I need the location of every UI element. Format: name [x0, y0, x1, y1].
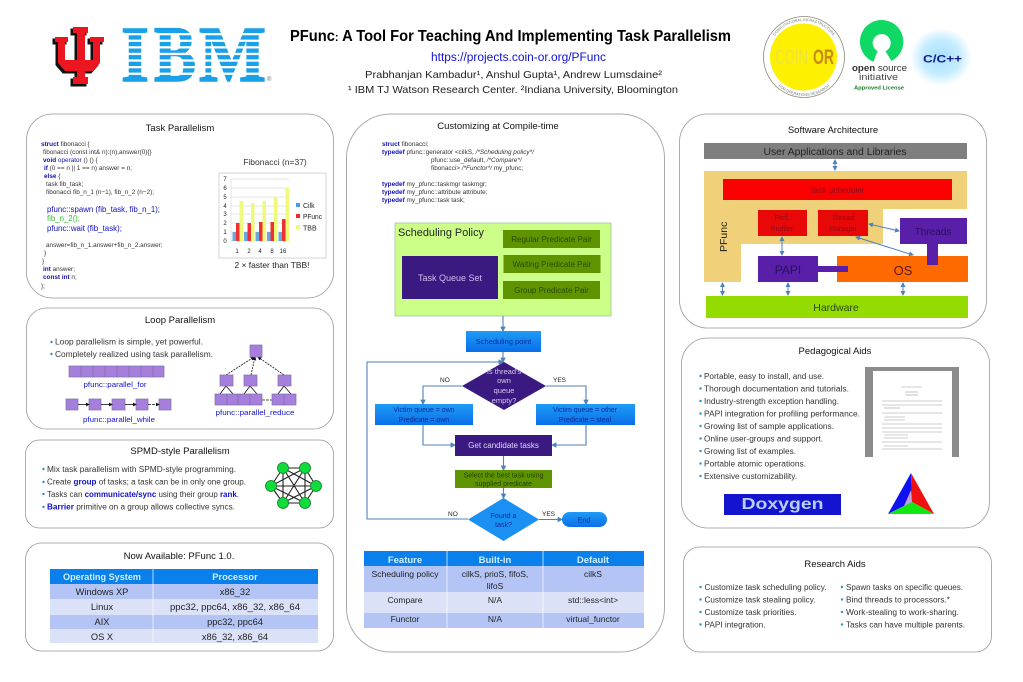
- flow: end: [562, 512, 607, 527]
- flow: select best task: [455, 470, 552, 488]
- flow: decision own queue empty: empty?: [492, 396, 516, 405]
- logo: C/C++: C/C++: [923, 54, 962, 66]
- bullets: Extensive customizability.: [704, 472, 797, 481]
- code listing: void operator () () {: [43, 157, 99, 164]
- code listing: fib_n_2();: [47, 214, 80, 223]
- bar chart: Fibonacci speedups: 4: [223, 204, 227, 210]
- flow: scheduling point: [466, 331, 541, 352]
- box: perf profiler: Profiler: [771, 226, 794, 233]
- logo: COIN-OR: OR: [813, 46, 834, 69]
- heading: Research Aids: [804, 559, 866, 570]
- code listing: typedef my_pfunc::attribute attribute;: [382, 189, 488, 196]
- box: threads: Threads: [915, 227, 951, 238]
- bullets: right column: Tasks can have multiple parents.: [846, 620, 965, 630]
- authors: Prabhanjan Kambadur¹, Anshul Gupta¹, Andrew Lumsdaine²: [365, 69, 663, 81]
- box: PFunc: PFunc: [718, 222, 730, 252]
- bullets: right column: Bind threads to processors.*: [846, 596, 950, 604]
- table: features: Scheduling policy: [372, 569, 439, 579]
- box: OS: [837, 256, 968, 282]
- code listing: struct fibonacci {: [41, 141, 91, 148]
- code listing: }: [44, 250, 47, 257]
- bar chart: Fibonacci speedups: TBB: [303, 226, 317, 232]
- code listing: typedef my_pfunc::taskmgr taskmgr;: [382, 181, 487, 188]
- box: thread manager: Manager: [829, 226, 857, 233]
- flow labels: [440, 377, 567, 518]
- table: operating systems and processors: ppc32, ppc64: [207, 617, 263, 627]
- bar chart: Fibonacci speedups: 6: [223, 186, 227, 192]
- table: features: Built-in: [479, 555, 512, 566]
- table: features: virtual_functor: [566, 614, 620, 624]
- box: thread manager: Thread: [832, 215, 854, 222]
- panel: Task Parallelism: [26, 114, 334, 298]
- flow: decision found a task: Found a: [491, 513, 516, 520]
- diagram: parallel_while: pfunc::parallel_while: [83, 415, 155, 424]
- logo: C/C++: [910, 28, 972, 86]
- bar chart: Fibonacci speedups: 2: [247, 249, 251, 255]
- bar chart: Fibonacci speedups: 0: [223, 239, 227, 245]
- bullets: Completely realized using task parallelism.: [55, 350, 213, 359]
- flow: select best task: Select the best task using: [464, 472, 543, 480]
- code listing: [382, 141, 535, 204]
- diagram: scheduling policy: [395, 223, 611, 316]
- logo: Doxygen: Doxygen: [742, 496, 824, 513]
- bullets: Growing list of sample applications.: [704, 422, 834, 431]
- flow: decision found a task: [468, 498, 539, 541]
- table: operating systems and processors: Linux: [91, 602, 113, 612]
- code listing: if (0 == n || 1 == n) answer = n;: [44, 165, 132, 172]
- code listing: answer=fib_n_1.answer+fib_n_2.answer;: [46, 242, 163, 249]
- bullets: Create group of tasks; a task can be in only one group.: [47, 478, 246, 486]
- bullets: Online user-groups and support.: [704, 434, 823, 444]
- panel: Software Architecture: [680, 114, 986, 328]
- flow: victim own: [375, 404, 473, 425]
- flow: select best task: supplied predicate: [475, 481, 532, 488]
- logo: Indiana University trident: [53, 27, 104, 86]
- code listing: pfunc::use_default, /*Compare*/: [431, 157, 523, 164]
- table: operating systems and processors: AIX: [94, 617, 110, 627]
- diagram: parallel_reduce: [215, 345, 296, 417]
- heading: SPMD-style Parallelism: [130, 446, 230, 457]
- table: features: Default: [577, 555, 610, 566]
- bullets: right column: [841, 583, 965, 630]
- table: features: cilkS, prioS, fifoS,: [462, 569, 528, 579]
- flow: victim other: [536, 404, 635, 425]
- table: operating systems and processors: Windows XP: [76, 587, 128, 597]
- bar chart: Fibonacci speedups: 3: [223, 212, 227, 218]
- bullets: Tasks can communicate/sync using their group rank.: [47, 490, 239, 499]
- logo: open source initiative: Approved License: [854, 86, 904, 92]
- code listing: else {: [44, 173, 61, 180]
- affiliations: ¹ IBM TJ Watson Research Center. ²Indiana University, Bloomington: [348, 84, 678, 96]
- bullets: Portable, easy to install, and use.: [704, 372, 824, 381]
- flow: victim own: Victim queue = own: [393, 407, 455, 414]
- table: features: Functor: [391, 614, 420, 624]
- bullets: right column: Spawn tasks on specific queues.: [846, 583, 963, 592]
- box: task scheduler: Task Scheduler: [810, 186, 865, 195]
- bullets: right column: Work-stealing to work-sharing.: [846, 608, 959, 617]
- code listing: pfunc::spawn (fib_task, fib_n_1);: [47, 205, 160, 214]
- panel: Research Aids: [684, 547, 992, 652]
- diagram: scheduling policy: Group Predicate Pair: [514, 286, 589, 295]
- code listing: [41, 141, 163, 290]
- flow: victim other: Victim queue = other: [553, 407, 618, 414]
- flow: get candidate tasks: Get candidate tasks: [468, 441, 539, 450]
- table: operating systems and processors: x86_32, x86_64: [202, 632, 268, 642]
- bullets: left column: Customize task scheduling policy.: [704, 583, 826, 592]
- bullets: Growing list of examples.: [704, 447, 796, 456]
- flow labels: YES: [553, 377, 567, 384]
- bullets: left column: PAPI integration.: [704, 620, 766, 630]
- bar chart: Fibonacci speedups: [219, 173, 326, 258]
- code listing: fibonacci fib_n_1 (n−1), fib_n_2 (n−2);: [46, 189, 154, 196]
- bullets: [699, 372, 860, 481]
- heading: Pedagogical Aids: [799, 346, 872, 357]
- panel: SPMD-style Parallelism: [26, 440, 334, 528]
- table: features: [364, 551, 644, 628]
- code listing: struct fibonacci;: [382, 141, 429, 148]
- bar chart: Fibonacci speedups: 4: [258, 249, 262, 255]
- diagram: scheduling policy: Regular Predicate Pair: [511, 235, 592, 244]
- table: operating systems and processors: ppc32, ppc64, x86_32, x86_64: [170, 602, 300, 612]
- bar chart: Fibonacci speedups: PFunc: [303, 214, 322, 221]
- code listing: typedef my_pfunc::task task;: [382, 197, 465, 204]
- bullets: [42, 465, 246, 512]
- arrow: apps to PFunc: [834, 160, 836, 170]
- table: features: N/A: [488, 595, 502, 605]
- flow: scheduling point: Scheduling point: [476, 337, 532, 346]
- logo: open source initiative: open source: [852, 63, 907, 73]
- box: user applications: [704, 143, 967, 159]
- bullets: left column: Customize task priorities.: [704, 608, 796, 617]
- table: features: std::less<int>: [568, 595, 618, 605]
- logo: IBM: B: [154, 12, 196, 99]
- icon: fully connected group: [266, 462, 322, 508]
- flow: end: End: [578, 518, 590, 524]
- panel: Now Available: [26, 543, 334, 651]
- table: features: N/A: [488, 614, 502, 624]
- diagram: parallel_reduce: pfunc::parallel_reduce: [216, 408, 294, 417]
- bullets: left column: [699, 583, 826, 630]
- bullets: [50, 338, 213, 359]
- bar chart: Fibonacci speedups: 8: [270, 249, 274, 255]
- flow labels: YES: [542, 511, 556, 518]
- flow: decision found a task: task?: [495, 522, 512, 529]
- logo: open source initiative: initiative: [859, 72, 898, 82]
- heading: Software Architecture: [788, 125, 878, 136]
- box: task scheduler: [723, 179, 952, 200]
- table: operating systems and processors: [50, 569, 318, 643]
- box: perf profiler: [758, 210, 807, 236]
- heading: Now Available: PFunc 1.0.: [124, 551, 234, 562]
- flowchart: task scheduling: [367, 316, 635, 541]
- logo: COIN-OR: FOR OPERATIONS RESEARCH: [778, 84, 830, 96]
- panel: Loop Parallelism: [26, 308, 334, 429]
- box: hardware: Hardware: [813, 302, 859, 314]
- project url: https://projects.coin-or.org/PFunc: [431, 52, 606, 64]
- table: features: cilkS: [584, 569, 602, 579]
- logo: IBM: I: [121, 12, 149, 99]
- code listing: }: [42, 258, 45, 265]
- box: PAPI: PAPI: [775, 263, 801, 277]
- box: threads: [900, 218, 967, 265]
- diagram: parallel_while: [66, 399, 171, 424]
- diagram: parallel_for: [69, 366, 164, 389]
- flow: victim own: Predicate = own: [399, 417, 449, 424]
- flow: victim other: Predicate = steal: [559, 417, 612, 424]
- chart caption: 2 × faster than TBB!: [234, 260, 310, 270]
- table: features: Feature: [388, 555, 422, 566]
- heading: Loop Parallelism: [145, 315, 215, 326]
- logo: IBM: ®: [267, 76, 272, 83]
- bullets: Industry-strength exception handling.: [704, 397, 839, 406]
- bullets: Mix task parallelism with SPMD-style programming.: [47, 465, 236, 474]
- table: operating systems and processors: Processor: [212, 572, 258, 582]
- logo: COIN-OR: COIN: [775, 46, 808, 69]
- logo: Doxygen: [724, 494, 841, 515]
- code listing: fibonacci> /*Functor*/ my_pfunc;: [431, 165, 523, 172]
- code listing: task fib_task;: [46, 181, 84, 188]
- logo: IBM: [118, 12, 272, 99]
- code listing: fibonacci (const int& n):(n),answer(0){}: [43, 149, 153, 156]
- logo: open source initiative: [852, 20, 907, 92]
- box: OS: OS: [894, 263, 913, 278]
- diagram: scheduling policy: Task Queue Set: [418, 273, 483, 283]
- logo: IBM: M: [199, 12, 266, 99]
- box: user applications: User Applications and Libraries: [764, 147, 906, 158]
- diagram: parallel_for: pfunc::parallel_for: [84, 380, 147, 389]
- bar chart: Fibonacci speedups: 16: [280, 249, 287, 255]
- box: perf profiler: Perf.: [775, 215, 789, 222]
- flow: decision own queue empty: Is thread's: [487, 367, 521, 376]
- bullets: left column: Customize task stealing policy.: [704, 596, 816, 604]
- bar chart: Fibonacci speedups: 5: [223, 195, 227, 201]
- flow labels: NO: [440, 377, 450, 384]
- bullets: Loop parallelism is simple, yet powerful.: [55, 338, 203, 346]
- table: features: lifoS: [487, 581, 504, 591]
- table: operating systems and processors: x86_32: [220, 587, 250, 597]
- diagram: scheduling policy: Scheduling Policy: [398, 227, 484, 239]
- bar chart: Fibonacci speedups: 7: [223, 177, 227, 183]
- heading: Customizing at Compile-time: [437, 121, 559, 132]
- box: PFunc: [704, 171, 967, 282]
- image: documentation screenshot: [865, 367, 959, 457]
- panel: Customizing at Compile-time: [346, 114, 664, 652]
- bullets: Barrier primitive on a group allows collective syncs.: [47, 502, 235, 512]
- heading: Task Parallelism: [146, 123, 214, 134]
- bar chart: Fibonacci speedups: 1: [223, 230, 227, 236]
- arrows: component links: [722, 224, 913, 295]
- bullets: Portable atomic operations.: [704, 460, 806, 468]
- logo: COIN-OR: COMPUTATIONAL INFRASTRUCTURE: [773, 18, 836, 36]
- box: hardware: [706, 296, 968, 318]
- flow labels: NO: [448, 511, 458, 518]
- logo: CMake triangle: [888, 473, 934, 514]
- code listing: };: [41, 283, 45, 290]
- table: operating systems and processors: OS X: [91, 632, 113, 642]
- bullets: PAPI integration for profiling performance.: [704, 410, 860, 418]
- code listing: int answer;: [43, 266, 75, 273]
- bar chart: Fibonacci speedups: Cilk: [303, 203, 315, 210]
- bar chart: Fibonacci speedups: 2: [223, 221, 227, 227]
- bullets: Thorough documentation and tutorials.: [704, 384, 849, 394]
- code listing: const int n;: [43, 274, 77, 281]
- code listing: pfunc::wait (fib_task);: [47, 224, 122, 233]
- box: thread manager: [818, 210, 868, 236]
- flow: decision own queue empty: own: [497, 376, 511, 385]
- flow: decision own queue empty: queue: [494, 386, 514, 395]
- diagram: scheduling policy: Waiting Predicate Pair: [513, 260, 592, 269]
- title: PFunc: A Tool For Teaching And Implementing Task Parallelism: [290, 28, 731, 45]
- flow: decision own queue empty: [462, 362, 546, 410]
- box: PAPI: [758, 256, 848, 282]
- logo: COIN-OR: [763, 16, 845, 98]
- flow: get candidate tasks: [455, 435, 552, 456]
- panel: Pedagogical Aids: [682, 338, 990, 528]
- table: operating systems and processors: Operating System: [63, 572, 141, 582]
- bar chart: Fibonacci speedups: 1: [235, 249, 239, 255]
- table: features: Compare: [388, 595, 423, 605]
- code listing: typedef pfunc::generator <cilkS, /*Scheduling policy*/: [382, 149, 535, 156]
- chart title: Fibonacci (n=37): [243, 157, 307, 167]
